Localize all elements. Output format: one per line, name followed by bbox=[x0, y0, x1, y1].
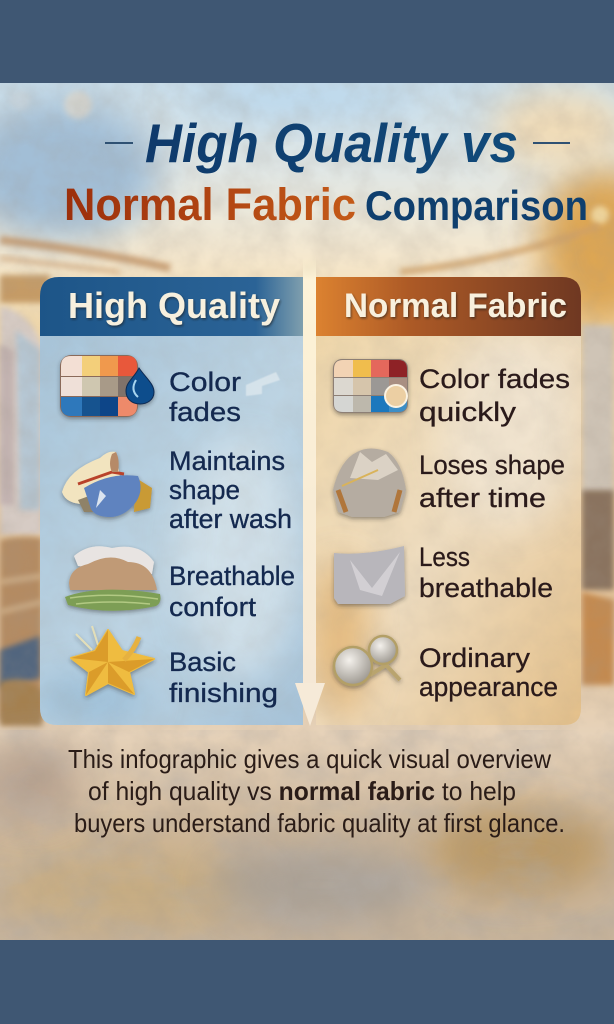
label: breathable comfort: confort bbox=[169, 592, 257, 622]
panel body: high quality bbox=[30, 336, 303, 730]
bottom navy band bbox=[0, 940, 614, 1024]
icon: grey cloth bbox=[334, 546, 405, 604]
label: color fades: fades bbox=[169, 397, 241, 427]
center divider arrow bbox=[295, 255, 325, 726]
title line 2 bbox=[64, 179, 588, 230]
footer description bbox=[68, 744, 565, 838]
label: ordinary appearance: appearance bbox=[419, 672, 558, 702]
icon: faint sparkle bbox=[246, 372, 280, 396]
icon: folded blue garment bbox=[62, 452, 152, 517]
label: loses shape bbox=[419, 450, 565, 513]
icon: colour swatch with drop bbox=[60, 355, 154, 417]
label: color fades quickly bbox=[419, 364, 570, 427]
item: color fades bbox=[60, 355, 280, 427]
label: loses shape: after time bbox=[419, 483, 546, 513]
panel header: normal fabric: Normal Fabric bbox=[344, 287, 567, 325]
item: ordinary appearance bbox=[334, 636, 558, 702]
item: color fades quickly bbox=[333, 359, 570, 427]
panel: normal fabric bbox=[310, 277, 581, 725]
label: loses shape: Loses shape bbox=[419, 450, 565, 480]
label: ordinary appearance: Ordinary bbox=[419, 643, 531, 673]
icon: metal buttons bbox=[334, 636, 400, 685]
panel header: normal fabric bbox=[316, 277, 581, 336]
label: breathable comfort bbox=[169, 561, 295, 622]
icon: worn shirt bbox=[333, 448, 406, 517]
title line 2: Comparison bbox=[365, 182, 588, 229]
top navy band bbox=[0, 0, 614, 83]
panel header: high quality: High Quality bbox=[68, 285, 280, 326]
footer description: This infographic gives a quick visual overview bbox=[68, 744, 551, 774]
label: ordinary appearance bbox=[419, 643, 558, 702]
item: maintains shape bbox=[62, 446, 292, 534]
footer description: buyers understand fabric quality at first glance. bbox=[74, 808, 565, 838]
panel: high quality bbox=[30, 277, 303, 730]
label: maintains shape: after wash bbox=[169, 504, 292, 534]
label: basic finishing: Basic bbox=[169, 647, 236, 677]
label: basic finishing: finishing bbox=[169, 678, 278, 708]
item: basic finishing bbox=[71, 626, 278, 708]
label: maintains shape bbox=[169, 446, 292, 534]
panel body: normal fabric bbox=[310, 330, 581, 725]
item: breathable comfort bbox=[65, 546, 295, 622]
label: color fades: Color bbox=[169, 367, 241, 397]
icon: cotton and leaves bbox=[65, 546, 160, 611]
footer description: of high quality vs normal fabric to help bbox=[88, 776, 516, 806]
label: color fades quickly: quickly bbox=[419, 397, 517, 427]
label: less breathable: Less bbox=[419, 542, 470, 572]
icon: gold star bbox=[71, 626, 154, 695]
label: less breathable bbox=[419, 542, 553, 603]
label: less breathable: breathable bbox=[419, 573, 553, 603]
title bbox=[64, 112, 588, 230]
item: loses shape bbox=[333, 448, 565, 517]
label: basic finishing bbox=[169, 647, 278, 708]
icon: faded colour swatch bbox=[333, 359, 408, 413]
panel header: high quality bbox=[40, 277, 303, 336]
label: breathable comfort: Breathable bbox=[169, 561, 295, 591]
title line 1: High Quality vs bbox=[145, 112, 518, 174]
label: maintains shape: shape bbox=[169, 475, 240, 505]
label: maintains shape: Maintains bbox=[169, 446, 285, 476]
title line 2: Normal Fabric bbox=[64, 179, 356, 230]
label: color fades bbox=[169, 367, 241, 427]
label: color fades quickly: Color fades bbox=[419, 364, 570, 394]
item: less breathable bbox=[334, 542, 553, 604]
